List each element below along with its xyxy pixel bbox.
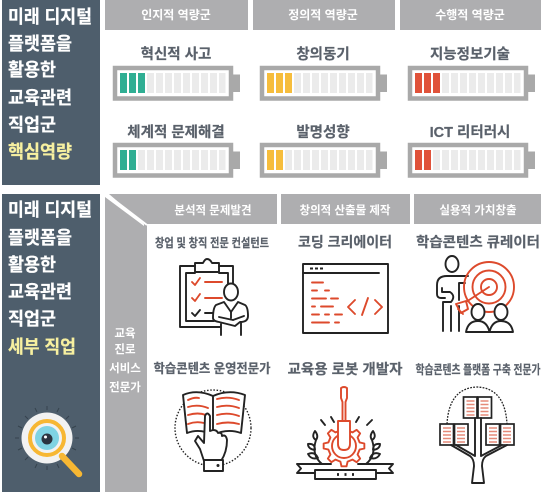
job: educational robot developer: [288, 361, 403, 479]
job: startup consultant: 창업 및 창직 전문 컨설턴트: [155, 235, 269, 250]
battery: innovative thinking: 혁신적 사고: [141, 46, 211, 63]
sidebar heading: core competency: 플랫폼을: [8, 34, 72, 54]
panel: detailed jobs sidebar: [2, 194, 100, 492]
job: learning content curator: [416, 234, 540, 332]
vertical label: education career service specialist: 서비스: [109, 362, 141, 375]
panel: core competency sidebar: [2, 0, 100, 185]
sidebar heading: core competency: 활용한: [8, 60, 56, 80]
header: performance competencies: [400, 0, 541, 30]
icon: gear, screwdriver and ribbon: [297, 387, 393, 479]
sidebar heading: detailed jobs: [8, 200, 92, 357]
battery: creative motivation: 창의동기: [296, 46, 350, 63]
sidebar heading: detailed jobs: 교육관련: [8, 282, 72, 302]
header: cognitive competencies: 인지적 역량군: [141, 8, 211, 22]
header: analytic problem discovery: 분석적 문제발견: [174, 203, 252, 217]
sidebar heading: detailed jobs: 플랫폼을: [8, 228, 72, 248]
vertical label: education career service specialist: [109, 327, 141, 394]
vertical label: education career service specialist: 진로: [114, 343, 136, 356]
job: learning content operations specialist: 학습콘텐츠 운영전문가: [154, 361, 271, 376]
battery: ICT literacy: [410, 124, 535, 176]
panel: corner and vertical job family label: [105, 193, 277, 492]
sidebar heading: detailed jobs: 직업군: [8, 309, 56, 329]
sidebar heading: core competency: 미래 디지털: [8, 7, 92, 27]
header: performance competencies: 수행적 역량군: [435, 7, 505, 22]
sidebar heading: core competency: 교육관련: [8, 88, 72, 108]
job: coding creator: [298, 234, 392, 333]
sidebar heading: core competency: 핵심역량: [8, 142, 72, 162]
header: affective competencies: 정의적 역량군: [288, 8, 358, 22]
battery: systematic problem solving: [115, 124, 240, 176]
icon: target and people: [437, 256, 514, 332]
battery: intelligent information technology: [410, 46, 535, 98]
sidebar heading: detailed jobs: 세부 직업: [8, 337, 76, 357]
vertical label: education career service specialist: 전문가: [109, 380, 141, 394]
job: coding creator: 코딩 크리에이터: [298, 234, 392, 250]
icon: tree of books: [440, 387, 514, 483]
header: creative output production: [281, 194, 410, 224]
header: affective competencies: [253, 0, 395, 30]
job: learning content curator: 학습콘텐츠 큐레이터: [416, 234, 540, 250]
job: learning content platform specialist: [416, 362, 541, 483]
job: educational robot developer: 교육용 로봇 개발자: [288, 361, 403, 377]
battery: ICT literacy: ICT 리터러시: [430, 124, 510, 141]
job: startup consultant: [155, 235, 269, 335]
icon: code window: [303, 264, 388, 333]
icon: magnifying glass with eye: [15, 406, 79, 474]
header: practical value creation: [414, 194, 541, 224]
battery: inventive tendency: [262, 124, 387, 176]
header: creative output production: 창의적 산출물 제작: [299, 203, 391, 217]
sidebar heading: detailed jobs: 활용한: [8, 255, 56, 275]
battery: creative motivation: [262, 46, 387, 98]
icon: clipboard and person: [180, 259, 248, 335]
battery: systematic problem solving: 체계적 문제해결: [127, 124, 225, 141]
sidebar heading: detailed jobs: 미래 디지털: [8, 200, 92, 220]
header: cognitive competencies: [105, 0, 248, 30]
sidebar heading: core competency: [8, 7, 92, 162]
vertical label: education career service specialist: 교육: [114, 327, 136, 340]
battery: inventive tendency: 발명성향: [296, 124, 350, 141]
job: learning content operations specialist: [154, 361, 271, 471]
battery: intelligent information technology: 지능정보기술: [430, 46, 510, 63]
header: practical value creation: 실용적 가치창출: [439, 203, 517, 217]
sidebar heading: core competency: 직업군: [8, 115, 56, 135]
battery: innovative thinking: [115, 46, 240, 98]
icon: open book and hand: [175, 390, 251, 471]
